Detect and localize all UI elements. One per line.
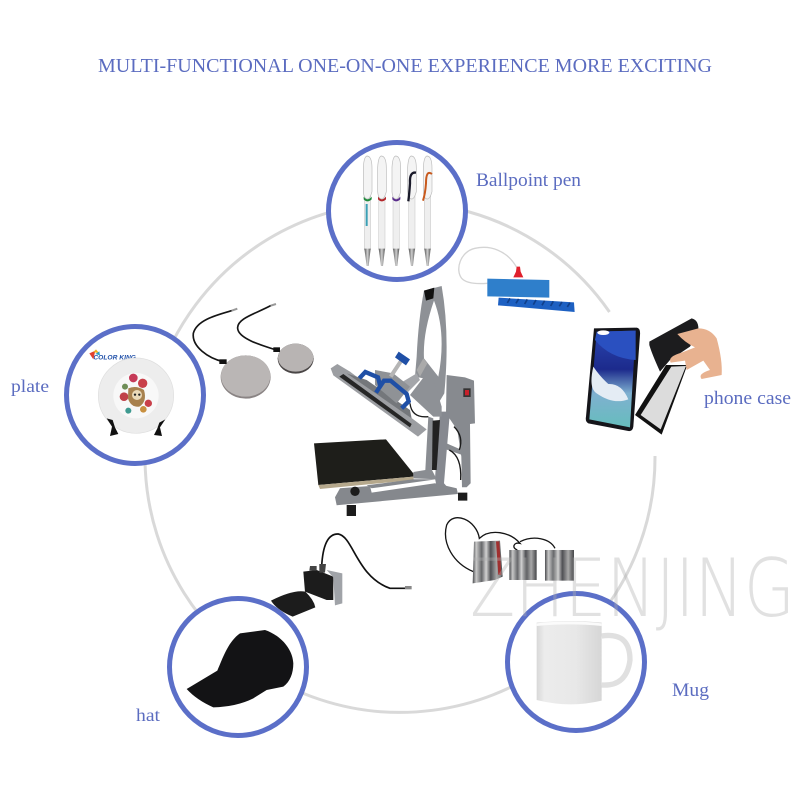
label: ballpoint pen: Ballpoint pen [476, 171, 581, 191]
panel: phone case [586, 318, 722, 435]
control box and frame [446, 375, 475, 487]
panel: hat circle [170, 598, 306, 736]
lower platen [314, 439, 413, 485]
phone case front [586, 328, 640, 431]
hand [670, 328, 722, 379]
machine arm [415, 286, 447, 403]
mug attachments: three metal presses with cords [446, 518, 574, 583]
pens [363, 156, 432, 266]
blue handles and knob [359, 372, 409, 408]
upper heat platen [331, 364, 427, 437]
label: mug: Mug [672, 681, 709, 701]
base [335, 483, 458, 505]
panel: plate circle [66, 326, 204, 464]
black cap [187, 630, 293, 707]
hat attachment: curved press with cord [271, 534, 412, 617]
large gray connecting ring [145, 202, 655, 712]
title: MULTI-FUNCTIONAL ONE-ON-ONE EXPERIENCE MORE EXCITING [98, 56, 712, 77]
plate attachment: two heating pads with cords [193, 304, 314, 399]
heat press machine [314, 286, 475, 516]
label: phone case: phone case [704, 389, 791, 409]
label: hat: hat [136, 705, 160, 725]
white mug [537, 621, 630, 704]
pen attachment: blue silicone clamp [459, 247, 575, 312]
phone case back [649, 318, 698, 372]
panel: ballpoint pen circle [328, 142, 466, 280]
pivot links [410, 373, 442, 417]
plate product: COLOR KING [93, 354, 136, 361]
panel: mug circle [508, 594, 644, 730]
label: plate: plate [11, 376, 49, 396]
